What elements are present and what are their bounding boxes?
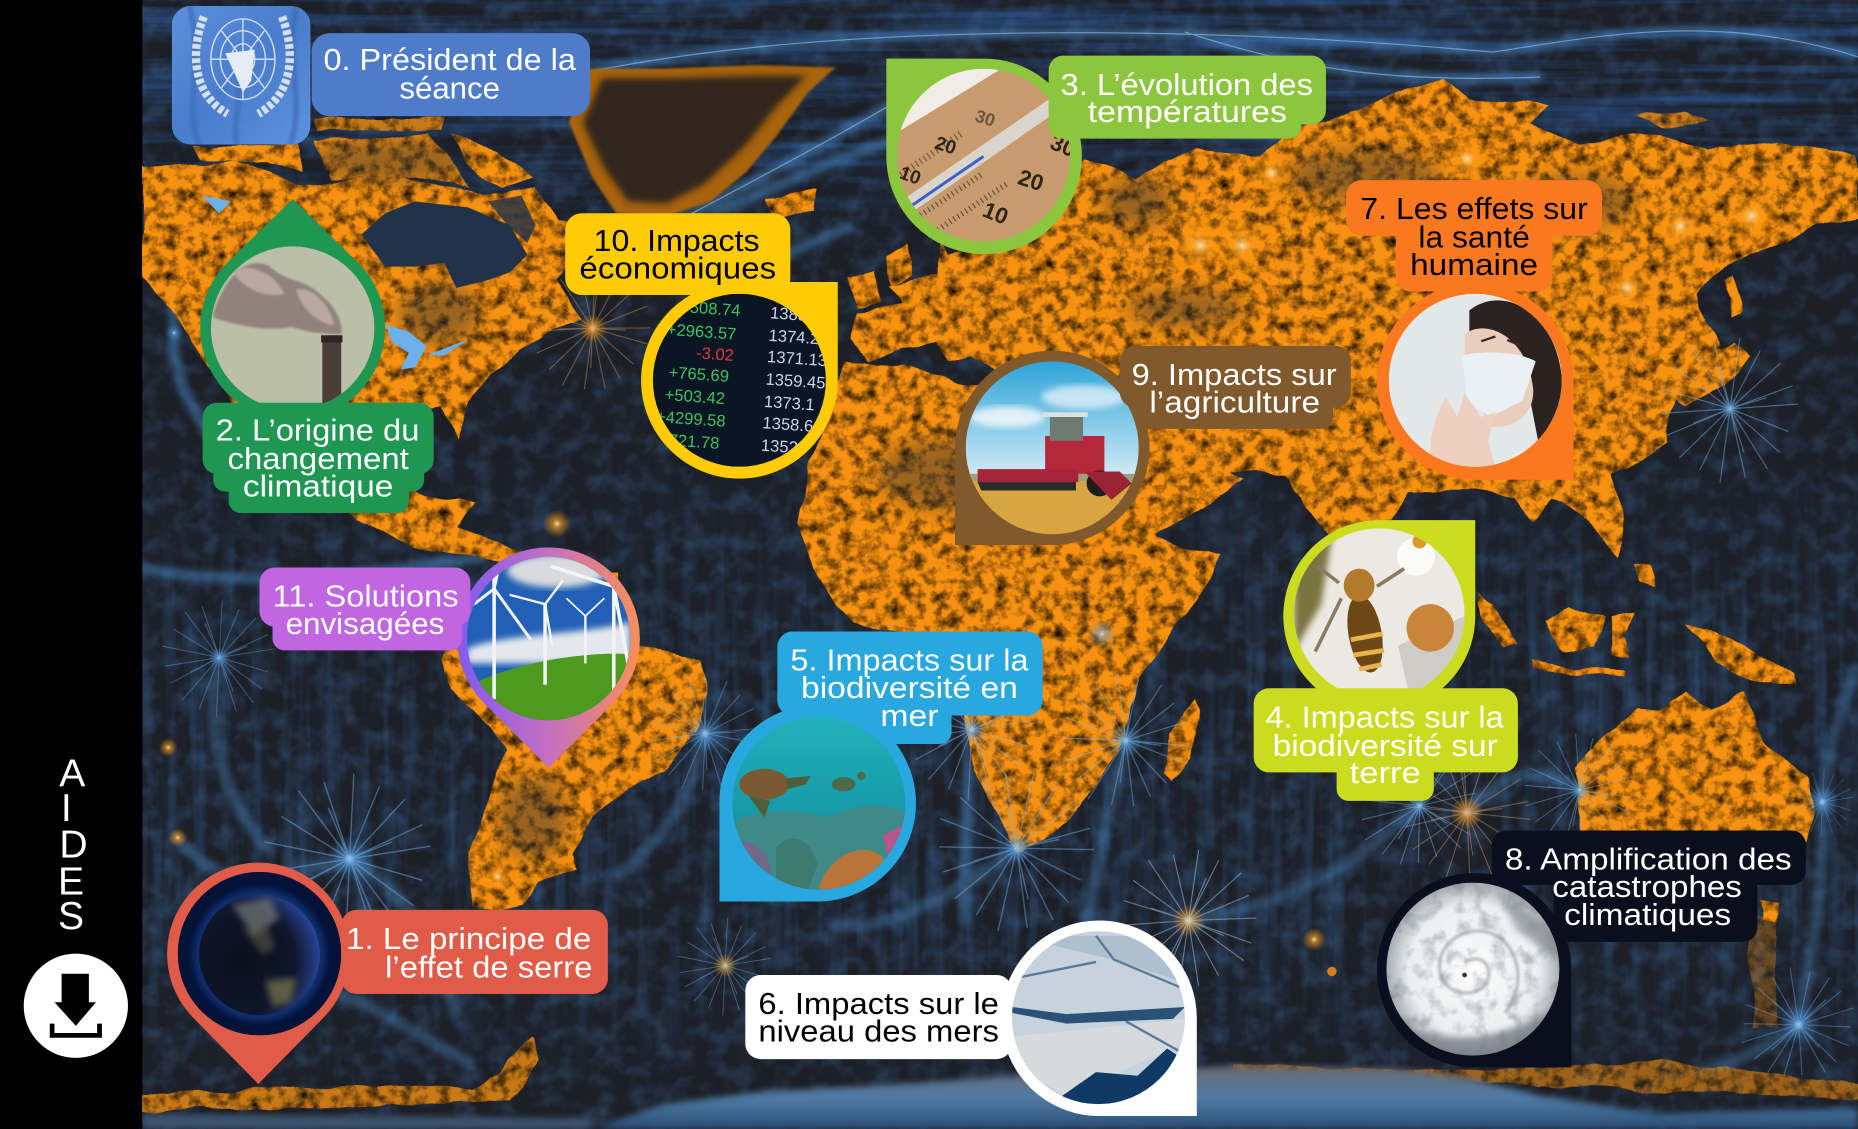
pin: yellow [641, 282, 838, 479]
label: biodiversité terre: 4. Impacts sur la [1266, 699, 1505, 734]
label: températures [1049, 56, 1326, 139]
label: origine: 2. L’origine du [216, 413, 419, 448]
label: président: séance [399, 70, 500, 105]
label: effet de serre: 1. Le principe de [346, 921, 591, 956]
photo: thermometer: 20 [1015, 165, 1047, 196]
label: santé: la santé [1418, 220, 1530, 255]
photo: ice floes [1012, 931, 1186, 1105]
photo: smoke stack [211, 246, 374, 410]
pin: navy [1377, 873, 1571, 1067]
pin: light green [886, 59, 1082, 254]
panel: 0 président de la séance [172, 6, 590, 145]
label: président: 0. Président de la [323, 42, 577, 77]
photo: coral and turtle [731, 717, 906, 894]
label: catastrophes [1492, 830, 1806, 942]
label: solutions: 11. Solutions [273, 579, 459, 614]
photo: stock ticker [653, 294, 831, 467]
label: niveau des mers [745, 975, 1012, 1059]
photo: woman with mask [1389, 294, 1563, 468]
antarctic band [142, 1066, 1858, 1129]
label: économiques: 10. Impacts [594, 223, 760, 258]
label: températures: températures [1088, 94, 1287, 129]
label: agriculture [1120, 346, 1351, 429]
photo: stock ticker: 1373.1 [763, 392, 815, 414]
label: températures: 3. L’évolution des [1061, 67, 1313, 102]
label: catastrophes: catastrophes [1552, 869, 1742, 904]
icon: download [24, 954, 128, 1058]
photo: stock ticker: 1358.6 [762, 413, 814, 436]
label: agriculture: 9. Impacts sur [1132, 357, 1337, 392]
aides vertical label: A [59, 753, 85, 796]
photo: stock ticker: +2963.57 [666, 320, 737, 344]
aides vertical label: I [61, 787, 72, 830]
photo: stock ticker: 1374.2 [768, 326, 820, 348]
label: santé: 7. Les effets sur [1360, 191, 1588, 226]
label: solutions [260, 567, 470, 650]
label: niveau des mers: niveau des mers [758, 1013, 999, 1048]
pin: sky blue [719, 705, 916, 902]
pin: brown [955, 351, 1149, 545]
label: économiques [565, 213, 790, 295]
network hubs [159, 135, 1858, 1096]
panel: 4 biodiversité terre [1254, 520, 1518, 801]
label: solutions: envisagées [286, 606, 444, 641]
darker land interiors [308, 139, 1635, 859]
label: biodiversité terre: terre [1350, 755, 1421, 790]
photo: thermometer: 10 [979, 197, 1012, 230]
photo: thermometer: 10 [896, 163, 923, 190]
photo: stock ticker: +4299.58 [655, 407, 726, 431]
photo: hurricane [1386, 883, 1561, 1060]
panel: 5 biodiversité mer [719, 631, 1043, 902]
panel: 1 effet de serre [167, 863, 608, 1084]
label: origine: climatique [243, 468, 393, 503]
photo: stock ticker: 1371.13 [767, 347, 828, 370]
photo: stock ticker: +503.42 [664, 385, 726, 408]
pin: lime [1283, 520, 1475, 712]
panel: 6 niveau des mers [745, 920, 1197, 1116]
panel: 2 origine [200, 199, 434, 513]
label: catastrophes: climatiques [1564, 897, 1731, 932]
pin: orange [1377, 283, 1574, 480]
photo: stock ticker: -3.02 [696, 343, 735, 365]
panel: 8 catastrophes [1377, 830, 1806, 1067]
label: santé: humaine [1410, 247, 1538, 282]
pin: coral [167, 863, 350, 1084]
photo: thermometer [896, 69, 1079, 243]
greenland [569, 65, 835, 216]
label: biodiversité mer: 5. Impacts sur la [790, 643, 1029, 678]
panel: 9 agriculture [955, 346, 1351, 545]
panel: 10 économiques [565, 213, 838, 479]
label: biodiversité terre: biodiversité sur [1273, 728, 1498, 763]
pin: gradient [457, 547, 640, 768]
photo: UN flag [172, 6, 310, 145]
label: origine [203, 403, 434, 513]
aides vertical label: S [58, 895, 84, 938]
label: économiques: économiques [579, 250, 776, 285]
label: origine: changement [228, 441, 409, 476]
photo: thermometer: 20 [932, 133, 959, 159]
photo: stock ticker: 1359.45 [765, 370, 826, 393]
panel: 11 solutions [260, 547, 640, 768]
hudson bay and lakes [201, 195, 536, 370]
photo: wind turbines [467, 554, 630, 723]
photo: thermometer: 30 [1047, 130, 1079, 162]
photo: stock ticker: 508.74 [689, 298, 741, 320]
aides vertical label: E [58, 860, 84, 903]
photo: thermometer: 30 [973, 106, 998, 131]
panel: 7 santé humaine [1346, 180, 1602, 480]
aides vertical label [58, 753, 88, 938]
photo: stock ticker: +765.69 [668, 363, 730, 386]
label: biodiversité mer: biodiversité en [801, 670, 1018, 705]
pin: white [1001, 920, 1197, 1116]
pin: green [200, 199, 385, 420]
label: niveau des mers: 6. Impacts sur le [758, 986, 999, 1021]
photo: harvester [966, 361, 1139, 537]
panel: 3 températures [886, 56, 1326, 254]
label: agriculture: l’agriculture [1149, 384, 1320, 419]
photo: stock ticker: 721.78 [668, 430, 720, 453]
photo: stock ticker: 1352 [760, 436, 798, 457]
label: effet de serre: l’effet de serre [385, 949, 592, 984]
label: catastrophes: 8. Amplification des [1505, 842, 1792, 877]
label: président [312, 33, 590, 116]
label: biodiversité mer [777, 631, 1043, 744]
aides vertical label: D [59, 824, 88, 867]
label: biodiversité mer: mer [880, 698, 938, 733]
label: effet de serre [341, 910, 608, 994]
sidebar [0, 0, 142, 1129]
photo: earth [178, 872, 341, 1035]
label: biodiversité terre [1254, 688, 1518, 801]
photo: bee [1294, 528, 1465, 699]
label: santé [1346, 180, 1602, 291]
photo: stock ticker: 1385 [770, 303, 808, 325]
